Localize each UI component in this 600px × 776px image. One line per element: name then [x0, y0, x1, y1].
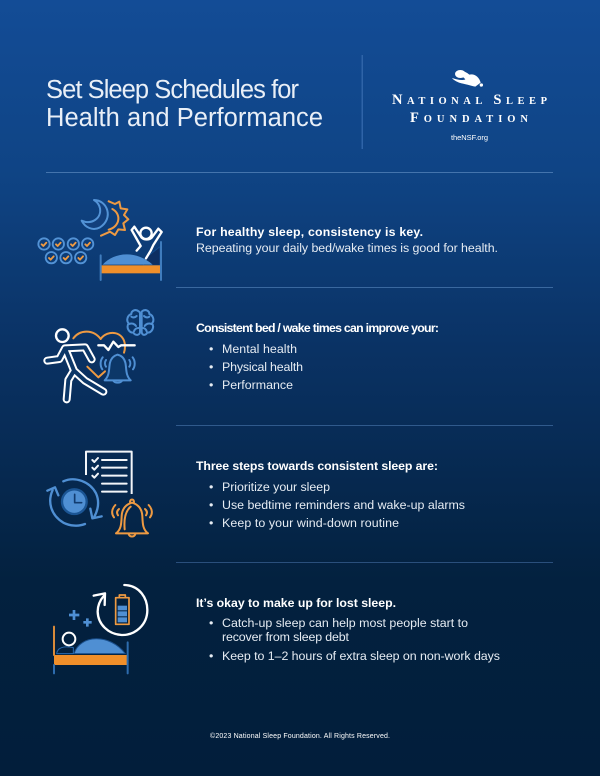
text block: three steps: Three steps towards consistent sleep are: [196, 459, 438, 473]
icon: heart [73, 332, 125, 377]
icon: alarm bell [112, 499, 152, 536]
logo: National Sleep Foundation [392, 70, 548, 142]
text block: lost sleep: It’s okay to make up for lost sleep. [196, 596, 396, 610]
text block: lost sleep: • [209, 649, 213, 663]
text block: consistency: Repeating your daily bed/wake times is good for health. [196, 241, 498, 255]
text block: lost sleep: Keep to 1–2 hours of extra sleep on non-work days [222, 649, 500, 663]
text block: lost sleep: Catch-up sleep can help most people start to [222, 616, 468, 630]
text block: three steps: Prioritize your sleep [222, 480, 330, 494]
text block: improvements: Physical health [222, 360, 303, 374]
title: Health and Performance [46, 104, 323, 132]
text block: improvements: • [209, 378, 213, 392]
text block: three steps: Keep to your wind-down routine [222, 516, 399, 530]
icon: runner, heart, pulse, brain and bell [47, 310, 153, 399]
icon: checklist [86, 452, 132, 494]
icon: moon [82, 200, 108, 229]
icon: recharge arrow [94, 585, 147, 635]
icon: check circles [38, 238, 93, 263]
text block: improvements [196, 321, 439, 392]
icon: runner [47, 329, 103, 399]
logo: National Sleep Foundation: N ATIONAL S LEEP [392, 92, 548, 108]
logo: National Sleep Foundation: F OUNDATION [410, 110, 528, 126]
text block: three steps: • [209, 498, 213, 512]
text block: lost sleep [196, 596, 500, 663]
text block: consistency [196, 225, 498, 255]
text block: lost sleep: recover from sleep debt [222, 630, 350, 644]
title: Set Sleep Schedules for [46, 76, 300, 104]
icon: bell [101, 355, 135, 383]
icon: pulse line [98, 342, 135, 350]
title [46, 76, 323, 132]
logo: National Sleep Foundation: theNSF.org [451, 133, 488, 142]
text block: consistency: For healthy sleep, consistency is key. [196, 225, 423, 239]
text block: three steps [196, 459, 465, 530]
icon: bed with sleeper [54, 627, 128, 673]
text block: lost sleep: • [209, 616, 213, 630]
icon: sleeping figure [452, 70, 483, 87]
icon: sun [101, 201, 128, 236]
icon: brain [127, 310, 153, 335]
text block: three steps: • [209, 516, 213, 530]
text block: improvements: Performance [222, 378, 293, 392]
icon: checklist, clock and alarm bell [47, 452, 152, 536]
text block: three steps: • [209, 480, 213, 494]
text block: improvements: Mental health [222, 342, 297, 356]
icon: battery [116, 595, 129, 624]
icon: sleeper with battery recharge and pluses [54, 585, 147, 673]
icon: clock with circular arrows [47, 479, 102, 526]
text block: improvements: • [209, 342, 213, 356]
footer: ©2023 National Sleep Foundation. All Rights Reserved. [210, 732, 390, 740]
text block: improvements: Consistent bed / wake times can improve your: [196, 321, 439, 335]
text block: improvements: • [209, 360, 213, 374]
icon: bed with person [101, 227, 162, 280]
icon: plus signs [69, 610, 92, 627]
text block: three steps: Use bedtime reminders and wake-up alarms [222, 498, 465, 512]
icon: moon, sun, checks and person waking in bed [38, 200, 162, 280]
